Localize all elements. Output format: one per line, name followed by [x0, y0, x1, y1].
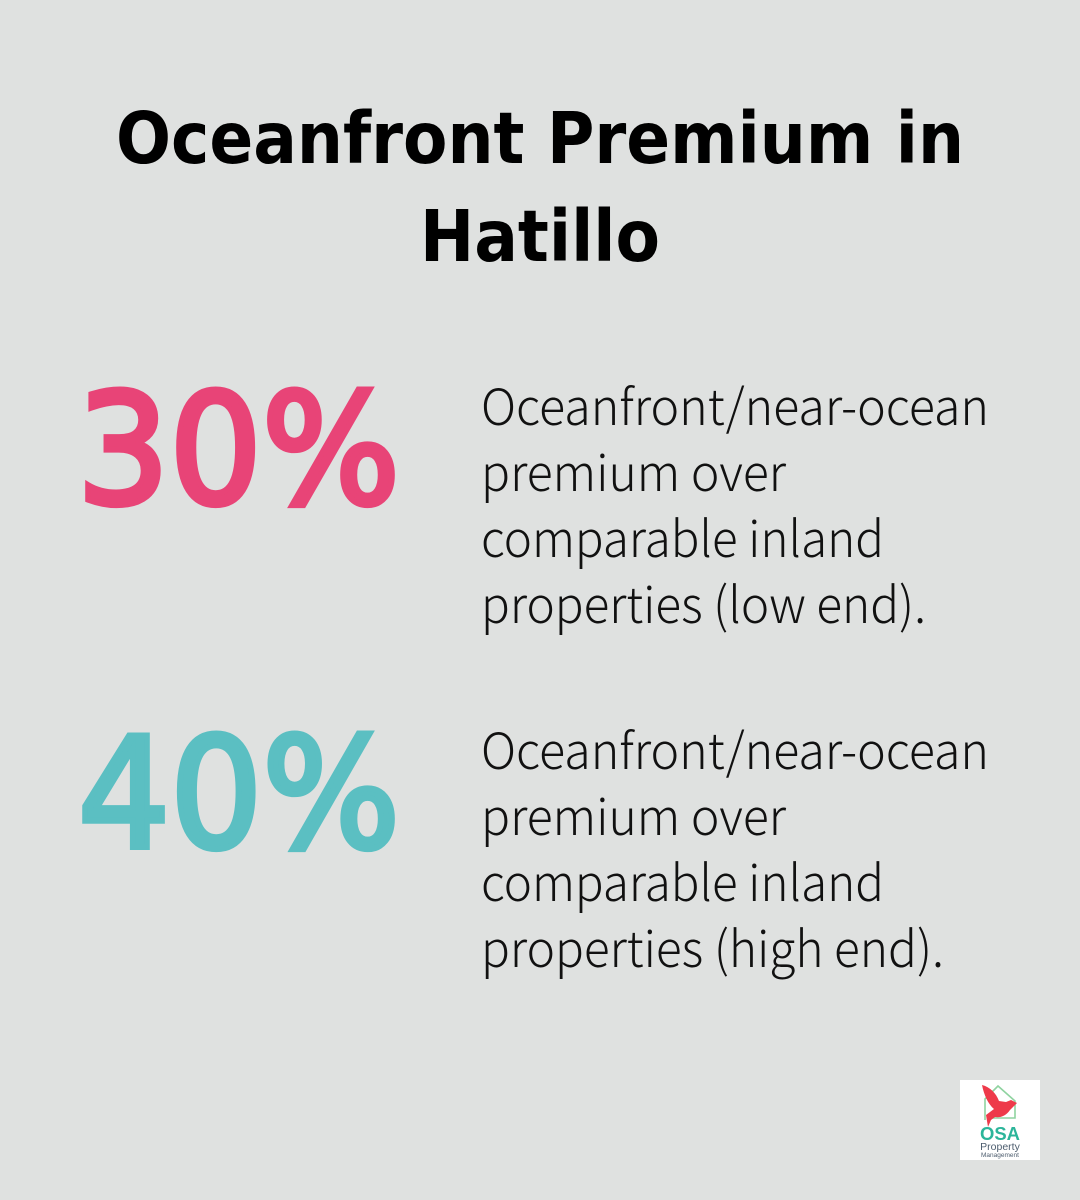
- logo text: Property: [980, 1141, 1021, 1153]
- stat: 30%: 30%: [77, 362, 400, 540]
- logo text: Management: [981, 1152, 1019, 1159]
- stat: 40%: 40%: [78, 706, 400, 884]
- description: high end: Oceanfront/near-ocean: [481, 712, 989, 784]
- description: low end: comparable inland: [481, 500, 884, 572]
- description: low end: Oceanfront/near-ocean: [481, 368, 989, 440]
- description: low end: premium over: [481, 434, 787, 506]
- icon: red bird: [982, 1085, 1017, 1127]
- title: [116, 97, 964, 278]
- title: Hatillo: [420, 195, 660, 278]
- description: high end: premium over: [481, 778, 787, 850]
- icon: house outline: [985, 1086, 1015, 1120]
- description: high end: properties (high end).: [481, 910, 944, 982]
- logo text: [980, 1124, 1021, 1159]
- description: high end: comparable inland: [481, 844, 884, 916]
- description: low end: properties (low end).: [481, 566, 926, 638]
- logo text: OSA: [980, 1124, 1020, 1144]
- title: Oceanfront Premium in: [116, 97, 964, 180]
- description: low end: [481, 368, 989, 638]
- description: high end: [481, 712, 989, 982]
- logo: OSA Property Management: [960, 1080, 1040, 1160]
